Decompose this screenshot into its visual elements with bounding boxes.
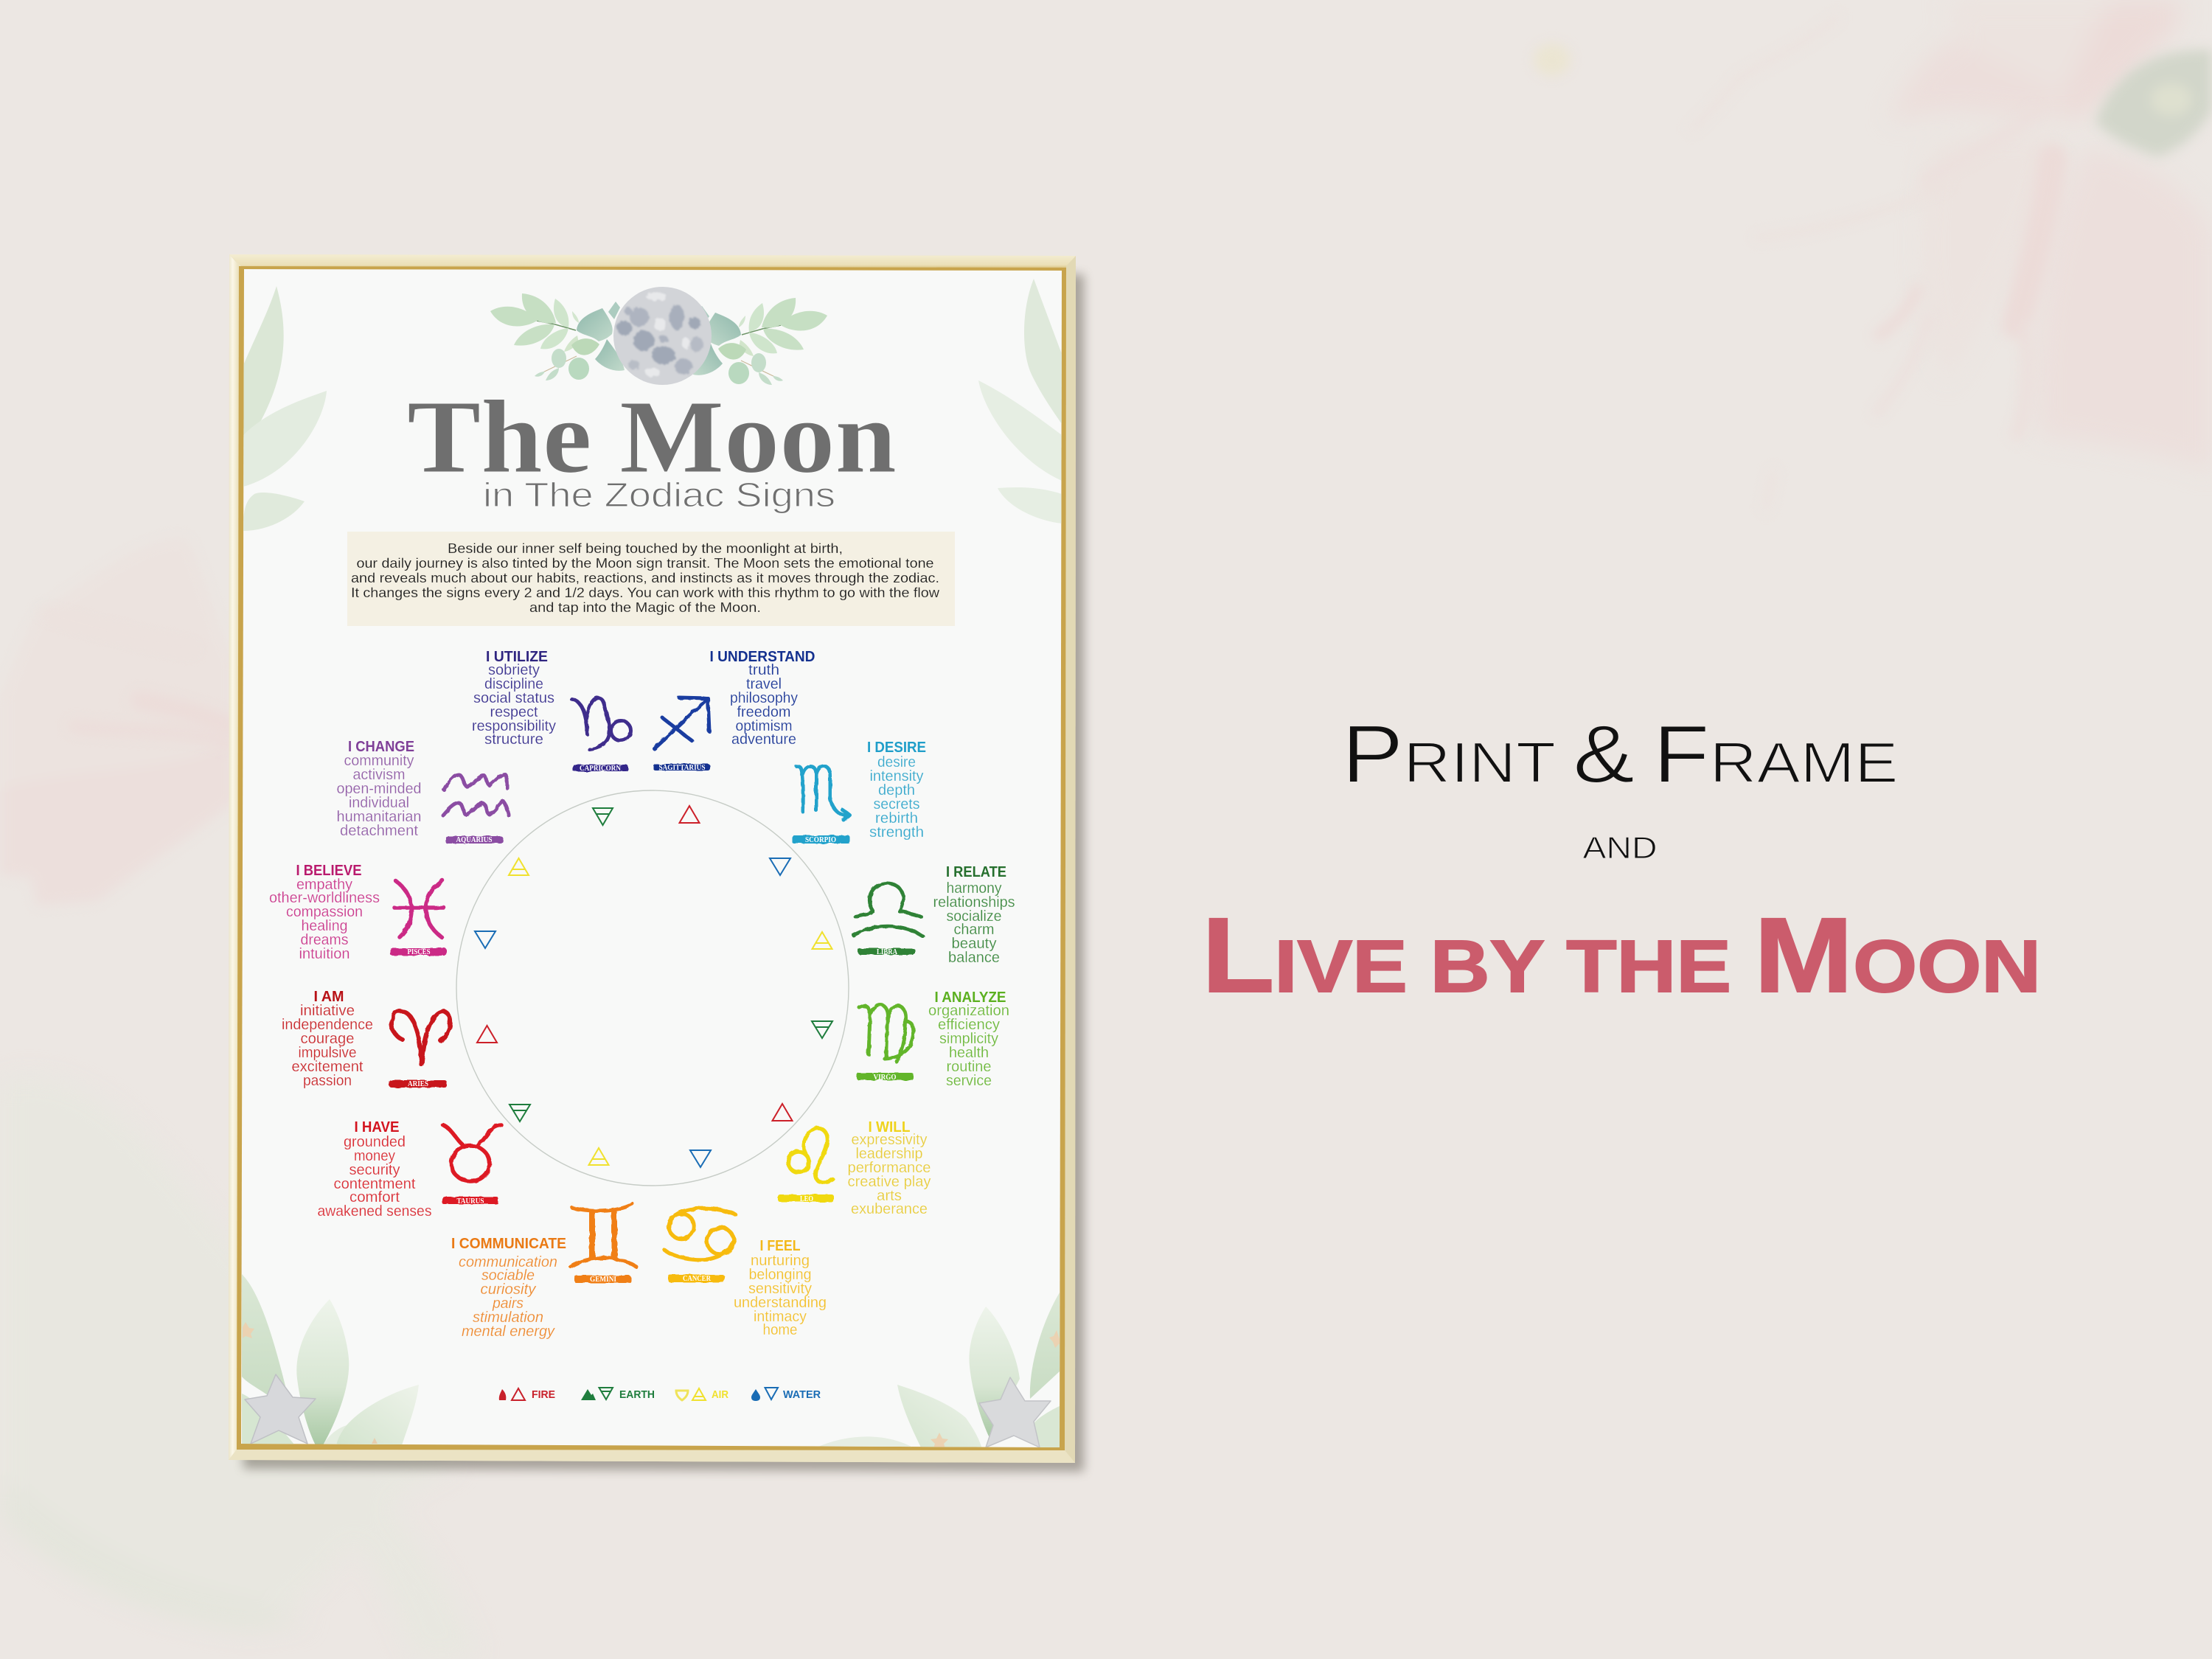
- text: I am: I AM: [314, 989, 344, 1005]
- grey-green bud, top right: [2096, 50, 2212, 156]
- text: I have: contentment: [333, 1176, 416, 1192]
- legend item: earth: [581, 1388, 655, 1401]
- text: I change: open-minded: [336, 781, 422, 797]
- text: I am: initiative: [300, 1003, 355, 1019]
- text: I relate: I RELATE: [946, 864, 1006, 880]
- wreath left leaves: [490, 293, 625, 380]
- silver star right: [979, 1377, 1051, 1447]
- silver star left: [245, 1374, 316, 1444]
- legend item: air: [676, 1388, 728, 1401]
- label band: SAGITTARIUS: [659, 763, 705, 772]
- poster: The Moon in The Zodiac Signs: [241, 269, 1062, 1449]
- text: I am: [282, 989, 373, 1089]
- text: I desire: rebirth: [875, 810, 918, 827]
- text: I analyze: efficiency: [938, 1017, 1000, 1033]
- heading: Print & Frame: PRINT & FRAME: [1342, 709, 1898, 800]
- text: I understand: I UNDERSTAND: [709, 649, 815, 665]
- wreath right leaves: [693, 298, 827, 385]
- text: I relate: [933, 864, 1015, 966]
- text: I utilize: social status: [473, 690, 554, 706]
- text: I have: security: [349, 1162, 400, 1178]
- text: I will: arts: [877, 1188, 902, 1204]
- text: I have: [317, 1119, 432, 1220]
- text: I feel: home: [762, 1322, 798, 1338]
- text: I believe: I BELIEVE: [296, 863, 361, 879]
- label band: [668, 1274, 725, 1283]
- label band: AQUARIUS: [456, 835, 493, 844]
- label band: CANCER: [683, 1274, 712, 1283]
- text: I communicate: pairs: [492, 1295, 524, 1312]
- text: I have: comfort: [349, 1189, 400, 1206]
- intro text box: and reveals much about our habits, reactions, and instincts as it moves through the zodiac.: [351, 571, 939, 585]
- text: I understand: optimism: [736, 718, 792, 734]
- sign: Taurus: [317, 1119, 501, 1220]
- sign: Scorpio: [792, 740, 926, 844]
- zodiac wheel ring: [456, 790, 849, 1186]
- text: I will: exuberance: [851, 1201, 928, 1217]
- label band: [792, 835, 850, 844]
- legend: elements: [499, 1388, 821, 1401]
- text: I relate: charm: [954, 922, 994, 938]
- text: I change: individual: [349, 795, 409, 811]
- text: I feel: nurturing: [751, 1253, 810, 1269]
- legend item: fire: [499, 1388, 555, 1401]
- text: I communicate: mental energy: [462, 1324, 555, 1340]
- text: I understand: [709, 649, 815, 748]
- text: I change: I CHANGE: [348, 739, 414, 755]
- intro text box: our daily journey is also tinted by the Moon sign transit. The Moon sets the emotional tone: [357, 556, 933, 571]
- text: I feel: sensitivity: [748, 1281, 812, 1297]
- icon: leo glyph: [788, 1128, 833, 1182]
- text: I change: humanitarian: [336, 809, 422, 825]
- text: I analyze: simplicity: [939, 1031, 998, 1047]
- wreath: moon with eucalyptus leaves: [490, 287, 827, 385]
- text: I feel: belonging: [749, 1267, 811, 1283]
- text: I believe: compassion: [286, 904, 363, 920]
- text: I relate: harmony: [947, 880, 1001, 897]
- label band: TAURUS: [457, 1197, 484, 1206]
- small tan star right edge: [1049, 1330, 1060, 1348]
- legend item: air: AIR: [712, 1388, 728, 1401]
- text: I analyze: [928, 990, 1009, 1089]
- text: I feel: [734, 1238, 827, 1338]
- text: I relate: balance: [948, 950, 1000, 966]
- pale petals, left: [0, 539, 236, 905]
- label band: VIRGO: [873, 1073, 897, 1082]
- sign: Aquarius: [336, 739, 509, 844]
- text: I desire: desire: [877, 754, 916, 771]
- label band: [778, 1194, 834, 1203]
- text: I have: I HAVE: [354, 1119, 400, 1135]
- text: I communicate: stimulation: [473, 1310, 543, 1326]
- icon: capricorn glyph: [571, 698, 631, 749]
- text: I analyze: service: [946, 1073, 992, 1089]
- text: I feel: I FEEL: [759, 1238, 801, 1254]
- label band: LIBRA: [877, 947, 897, 956]
- text: I change: [336, 739, 422, 839]
- text: I have: grounded: [344, 1134, 406, 1150]
- text: I utilize: I UTILIZE: [486, 649, 548, 665]
- icon: aquarius glyph: [443, 774, 509, 815]
- text: I analyze: organization: [928, 1003, 1009, 1019]
- corner leaves group: [242, 279, 1062, 1449]
- label band: CAPRICORN: [580, 764, 621, 773]
- yellow spot: [1534, 44, 1571, 76]
- text: I believe: other-worldliness: [269, 890, 380, 906]
- legend item: fire: FIRE: [532, 1388, 555, 1401]
- heading: Live by the Moon: LIVE BY THE MOON: [1202, 896, 2041, 1015]
- sign: Sagittarius: [653, 649, 815, 772]
- leaves: top right: [978, 279, 1062, 524]
- text: I communicate: sociable: [481, 1267, 535, 1284]
- text: I understand: freedom: [737, 704, 790, 720]
- sign: Virgo: [857, 990, 1009, 1089]
- text: I relate: socialize: [947, 908, 1001, 925]
- text: I desire: intensity: [870, 768, 923, 785]
- leaves: bottom right: [818, 1293, 1060, 1449]
- text: I will: creative play: [848, 1174, 931, 1190]
- leaves: top left: [242, 286, 327, 531]
- label band: [442, 1197, 498, 1206]
- text: I believe: empathy: [296, 877, 352, 893]
- text: I will: I WILL: [869, 1119, 910, 1135]
- text: I utilize: discipline: [484, 676, 543, 692]
- label band: [857, 1073, 914, 1082]
- legend item: water: WATER: [783, 1388, 821, 1401]
- label band: GEMINI: [590, 1275, 616, 1284]
- legend item: water: [751, 1388, 821, 1401]
- icon: cancer glyph: [664, 1208, 735, 1259]
- text: I am: passion: [303, 1073, 352, 1089]
- text: I relate: beauty: [951, 936, 997, 952]
- sign: Cancer: [664, 1208, 827, 1338]
- sign: Gemini: [451, 1204, 636, 1340]
- intro text box: Beside our inner self being touched by the moonlight at birth,: [448, 541, 843, 556]
- text: I am: independence: [282, 1017, 373, 1033]
- icon: virgo glyph: [859, 1005, 914, 1062]
- text: I communicate: [451, 1236, 566, 1340]
- text: I utilize: respect: [490, 704, 538, 720]
- label band: ARIES: [408, 1079, 428, 1088]
- icon: aries glyph: [392, 1011, 450, 1065]
- text: I change: detachment: [340, 823, 418, 839]
- text: I utilize: [472, 649, 556, 748]
- intro text box: It changes the signs every 2 and 1/2 days. You can work with this rhythm to go with the flow: [351, 585, 940, 600]
- label band: LEO: [800, 1194, 813, 1203]
- icon: pisces glyph: [394, 880, 444, 937]
- text: I utilize: sobriety: [488, 662, 540, 678]
- text: I utilize: responsibility: [472, 718, 556, 734]
- text: I communicate: curiosity: [481, 1281, 537, 1298]
- text: I believe: [269, 863, 380, 962]
- legend item: earth: EARTH: [619, 1388, 655, 1401]
- icon: taurus glyph: [443, 1125, 501, 1181]
- text: I feel: intimacy: [754, 1309, 807, 1325]
- intro text box: [347, 532, 955, 626]
- text: I change: community: [344, 753, 414, 769]
- moon: [613, 287, 712, 385]
- icon: sagittarius glyph: [654, 698, 709, 748]
- icon: gemini glyph: [571, 1204, 636, 1267]
- text: I have: awakened senses: [317, 1203, 432, 1220]
- label band: [390, 947, 447, 956]
- text: I desire: secrets: [873, 796, 920, 813]
- pale petals, top right: [1888, 0, 2212, 472]
- label band: [574, 1275, 631, 1284]
- frame shadow: [243, 274, 1084, 1472]
- small tan star bottom left: [372, 1438, 378, 1444]
- label band: [389, 1079, 447, 1088]
- text: I feel: understanding: [734, 1295, 827, 1311]
- leaves: bottom left: [242, 1274, 419, 1445]
- text: I am: courage: [301, 1031, 354, 1047]
- text: I utilize: structure: [484, 731, 543, 748]
- element triangles around the wheel: [475, 806, 832, 1167]
- text: I desire: depth: [878, 782, 915, 799]
- text: I desire: I DESIRE: [867, 740, 926, 756]
- text: I change: activism: [352, 767, 406, 783]
- text: I analyze: routine: [947, 1059, 991, 1075]
- text: I am: impulsive: [298, 1045, 357, 1061]
- text: I analyze: health: [949, 1045, 989, 1061]
- pale leaves, bottom left: [0, 1077, 479, 1659]
- text: I will: leadership: [855, 1146, 923, 1162]
- sign: Leo: [778, 1119, 931, 1217]
- label band: SCORPIO: [805, 835, 836, 844]
- small tan star left: [243, 1322, 254, 1338]
- text: I communicate: I COMMUNICATE: [451, 1236, 566, 1252]
- sign: Capricorn: [472, 649, 631, 773]
- title: The Moon: [407, 378, 897, 495]
- subtitle: in The Zodiac Signs: [483, 476, 835, 514]
- text: and: AND: [1582, 830, 1658, 865]
- text: I desire: [867, 740, 926, 841]
- icon: libra glyph: [853, 883, 923, 936]
- text: I will: expressivity: [851, 1132, 928, 1148]
- text: I understand: travel: [746, 676, 782, 692]
- text: I have: money: [354, 1148, 395, 1164]
- text: I desire: strength: [869, 824, 924, 841]
- text: I will: performance: [848, 1160, 931, 1176]
- text: I understand: adventure: [731, 731, 796, 748]
- sign: Pisces: [269, 863, 447, 962]
- icon: scorpio glyph: [796, 766, 849, 820]
- label band: PISCES: [407, 947, 431, 956]
- text: I understand: truth: [748, 662, 779, 678]
- text: I will: [848, 1119, 931, 1217]
- text: I analyze: I ANALYZE: [935, 990, 1006, 1006]
- text: I understand: philosophy: [730, 690, 798, 706]
- text: I relate: relationships: [933, 894, 1015, 911]
- sign: Aries: [282, 989, 450, 1089]
- text: I am: excitement: [292, 1059, 364, 1075]
- text: I believe: dreams: [301, 932, 348, 948]
- text: I believe: intuition: [299, 946, 349, 962]
- text: I believe: healing: [301, 918, 348, 934]
- poster frame: [229, 254, 1076, 1463]
- text: I communicate: communication: [459, 1254, 557, 1270]
- label band: [858, 947, 915, 956]
- small tan star right: [931, 1433, 948, 1448]
- sign: Libra: [853, 864, 1015, 966]
- intro text box: and tap into the Magic of the Moon.: [529, 600, 761, 615]
